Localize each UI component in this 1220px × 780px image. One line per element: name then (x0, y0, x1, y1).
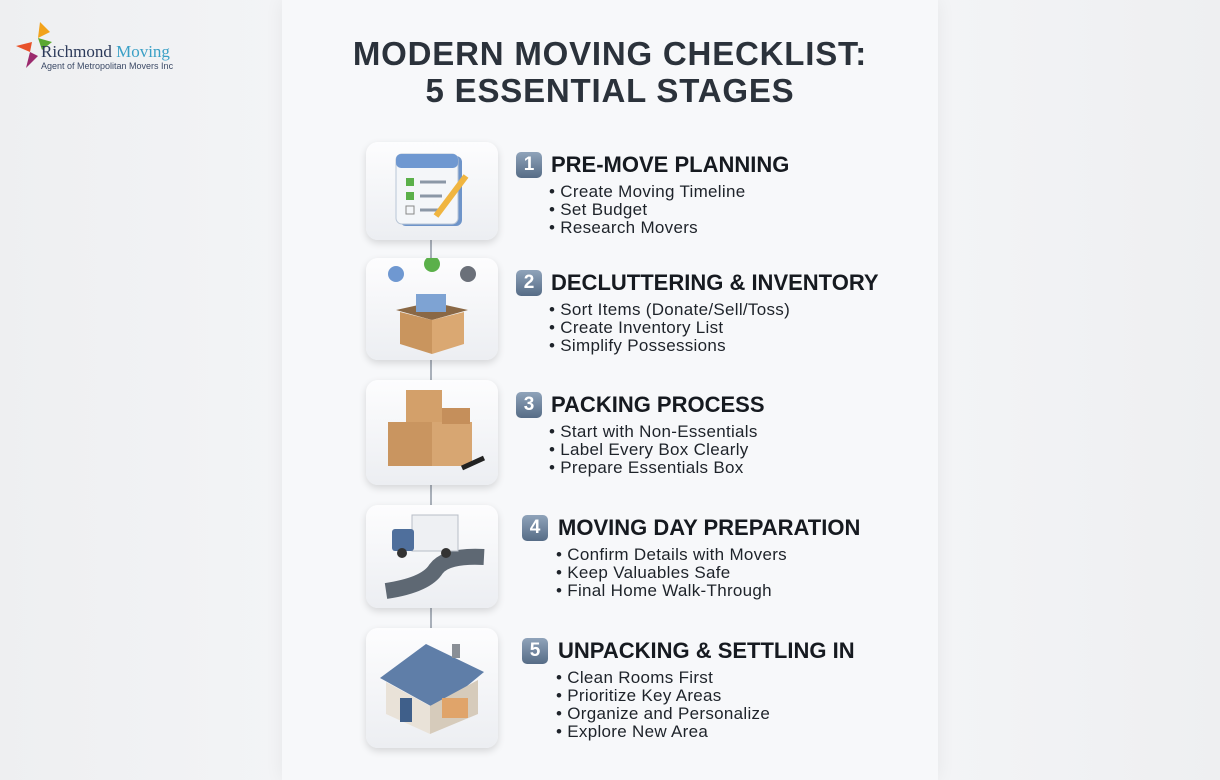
stage 5 text: • Organize and Personalize (556, 704, 770, 723)
card: stage 3 icon boxes (366, 380, 498, 485)
card: stage 1 icon calendar (366, 142, 498, 240)
stage 2 text (516, 270, 879, 355)
stage 5 text: • Prioritize Key Areas (556, 686, 722, 705)
stage 4 text: • Final Home Walk-Through (556, 581, 772, 600)
stage 4 text: MOVING DAY PREPARATION (558, 515, 860, 540)
stage 4 text: • Keep Valuables Safe (556, 563, 730, 582)
title: 5 ESSENTIAL STAGES (426, 72, 794, 109)
stage 5 text (522, 638, 855, 741)
stage 2 text: DECLUTTERING & INVENTORY (551, 270, 879, 295)
stage 5 text: UNPACKING & SETTLING IN (558, 638, 855, 663)
stage 1 text: • Set Budget (549, 200, 647, 219)
title (353, 35, 867, 109)
stage 3 text: • Start with Non-Essentials (549, 422, 758, 441)
stage 3 text: • Prepare Essentials Box (549, 458, 744, 477)
stage 1 text: 1 (524, 154, 534, 175)
title: MODERN MOVING CHECKLIST: (353, 35, 867, 72)
logo: Agent of Metropolitan Movers Inc (41, 61, 173, 71)
stage 4 text (522, 515, 860, 600)
stage 2 text: • Simplify Possessions (549, 336, 726, 355)
logo: Richmond Moving (41, 42, 170, 61)
stage 3 text: PACKING PROCESS (551, 392, 765, 417)
stage 3 text: 3 (524, 394, 534, 415)
panel: center background (282, 0, 938, 780)
card: stage 5 icon house (366, 628, 498, 748)
logo (16, 22, 173, 71)
stage 5 text: • Clean Rooms First (556, 668, 713, 687)
stage 2 text: • Create Inventory List (549, 318, 723, 337)
connector line (430, 240, 432, 640)
stage 4 text: 4 (530, 517, 540, 538)
stage 1 text: • Create Moving Timeline (549, 182, 745, 201)
stage 1 text: PRE-MOVE PLANNING (551, 152, 789, 177)
stage 4 text: • Confirm Details with Movers (556, 545, 787, 564)
stage 3 text (516, 392, 765, 477)
stage 1 text: • Research Movers (549, 218, 698, 237)
stage 3 text: • Label Every Box Clearly (549, 440, 749, 459)
card: stage 4 icon truck (366, 505, 498, 608)
stage 1 text (516, 152, 789, 237)
card: stage 2 icon box (366, 258, 498, 360)
stage 2 text: 2 (524, 272, 534, 293)
stage 5 text: • Explore New Area (556, 722, 708, 741)
stage 5 text: 5 (530, 640, 540, 661)
stage 2 text: • Sort Items (Donate/Sell/Toss) (549, 300, 790, 319)
